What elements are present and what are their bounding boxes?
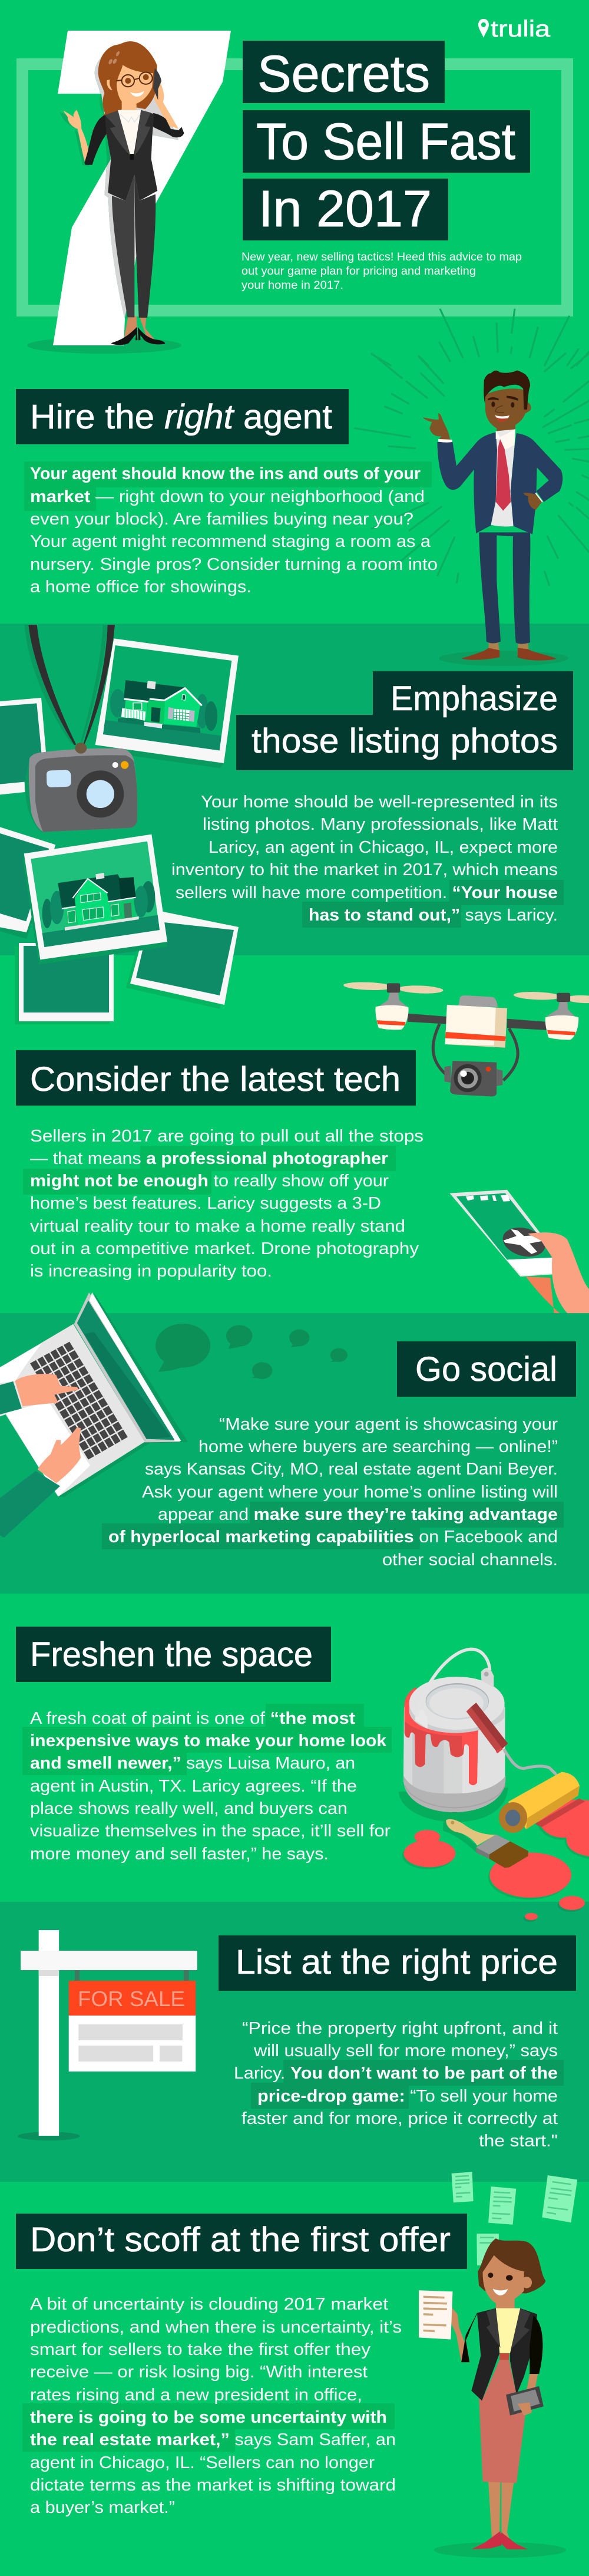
- illustration: photos and camera: [0, 625, 239, 939]
- heading: Consider the latest tech: [30, 1060, 401, 1099]
- body text: home’s best features. Laricy suggests a 3-D: [30, 1194, 381, 1213]
- body text: Your home should be well-represented in its: [201, 793, 558, 812]
- heading: [16, 389, 349, 444]
- body text: Sellers in 2017 are going to pull out all the stops: [30, 1127, 423, 1146]
- body text: “Make sure your agent is showcasing your: [219, 1415, 558, 1434]
- illustration: drone with camera: [343, 981, 589, 1096]
- illustration: woman holding document and tablet: [419, 2238, 566, 2558]
- section: hire the right agent: [16, 354, 589, 666]
- heading: Emphasize: [391, 680, 558, 718]
- heading: Go social: [415, 1350, 557, 1388]
- for sale label: FOR SALE: [78, 1987, 185, 2011]
- illustration: for sale sign: [18, 1930, 197, 2140]
- photo: house one: [95, 638, 239, 768]
- light green frame: [16, 58, 573, 316]
- body text: more money and sell faster,” he says.: [30, 1845, 329, 1863]
- heading: [236, 671, 573, 770]
- body text: listing photos. Many professionals, like Matt: [203, 815, 558, 834]
- body text: out in a competitive market. Drone photography: [30, 1239, 419, 1258]
- section: consider the latest tech: [16, 981, 589, 1313]
- title: Secrets: Secrets: [257, 45, 430, 103]
- body text: [102, 1415, 564, 1569]
- body text: faster and for more, price it correctly at: [241, 2109, 558, 2128]
- agent ground shadow: [439, 651, 568, 666]
- body text: smart for sellers to take the first offer they: [30, 2340, 371, 2359]
- body text: [22, 1704, 392, 1863]
- paint drops crossing band: [523, 1896, 585, 1922]
- heading: Don’t scoff at the first offer: [30, 2221, 451, 2259]
- body text: — that means a professional photographer: [30, 1149, 388, 1168]
- body text: might not be enough to really show off your: [30, 1172, 389, 1190]
- sunburst rays around agent: [355, 354, 589, 585]
- body text: visualize themselves in the space, it’ll sell for: [30, 1822, 391, 1841]
- section: freshen the space: [16, 1627, 589, 1899]
- photo: house two: [22, 835, 167, 965]
- body text: rates rising and a new president in office,: [30, 2386, 362, 2405]
- section: list at the right price: [18, 1896, 585, 2150]
- body text: sellers will have more competition. “Your house: [176, 883, 558, 902]
- section: don't scoff at the first offer: [16, 2172, 577, 2558]
- floating document sheets: [452, 2172, 577, 2265]
- body text: agent in Chicago, IL. “Sellers can no longer: [30, 2453, 375, 2472]
- woman cast shadow on seven: [95, 44, 178, 318]
- body text: Laricy. You don’t want to be part of the: [234, 2064, 558, 2083]
- body text: home where buyers are searching — online!”: [198, 1437, 558, 1456]
- agent shoes: [461, 648, 557, 661]
- sunburst rays upper: [372, 309, 589, 365]
- body text: Laricy, an agent in Chicago, IL, expect more: [209, 838, 558, 857]
- body text: the real estate market,” says Sam Saffer, an: [30, 2430, 396, 2449]
- heading: [219, 1935, 576, 1991]
- photo: lower right blank: [126, 912, 239, 1009]
- heading: [16, 1627, 331, 1682]
- heading: List at the right price: [236, 1943, 558, 1981]
- body text: [234, 2019, 564, 2150]
- woman cast shadow on green: [60, 44, 178, 318]
- body text: Ask your agent where your home’s online listing will: [142, 1483, 558, 1502]
- body text: the start.": [479, 2132, 558, 2150]
- body text: says Kansas City, MO, real estate agent Dani Beyer.: [145, 1460, 558, 1479]
- section: emphasize listing photos: [0, 625, 573, 1024]
- heading: Freshen the space: [30, 1635, 313, 1674]
- body text: [171, 793, 564, 928]
- body text: agent in Austin, TX. Laricy agrees. “If the: [30, 1777, 357, 1796]
- body text: inventory to hit the market in 2017, which means: [171, 860, 558, 879]
- camera strap: [25, 625, 115, 747]
- intro text: your home in 2017.: [241, 279, 343, 292]
- photo: left top: [0, 698, 46, 794]
- body text: dictate terms as the market is shifting toward: [30, 2476, 396, 2495]
- title: In 2017: In 2017: [259, 180, 432, 238]
- paint spills: [402, 1800, 589, 1899]
- body text: a buyer’s market.”: [30, 2498, 175, 2517]
- body text: [22, 2295, 402, 2517]
- body text: even your block). Are families buying near you?: [30, 510, 413, 529]
- body text: has to stand out,” says Laricy.: [309, 906, 558, 925]
- body text: market — right down to your neighborhood (and: [30, 487, 425, 506]
- body text: virtual reality tour to make a home really stand: [30, 1217, 405, 1236]
- logo: trulia: trulia: [491, 17, 550, 42]
- logo: trulia: [478, 17, 550, 42]
- body text: and smell newer,” says Luisa Mauro, an: [30, 1754, 355, 1773]
- body text: place shows really well, and buyers can: [30, 1799, 348, 1818]
- illustration: male agent in suit: [423, 370, 562, 654]
- heading: [397, 1341, 576, 1397]
- illustration: hand holding phone: [449, 1190, 589, 1313]
- heading: Hire the right agent: [30, 398, 332, 436]
- body text: a home office for showings.: [30, 578, 252, 596]
- body text: of hyperlocal marketing capabilities on Facebook and: [108, 1528, 558, 1546]
- illustration: businesswoman on phone: [63, 41, 184, 345]
- woman ground shadow: [27, 337, 181, 354]
- illustration: laptop and hands: [0, 1292, 188, 1538]
- photo: lower left blank: [15, 943, 114, 1024]
- body text: will usually sell for more money,” says: [253, 2041, 558, 2060]
- body text: other social channels.: [382, 1551, 558, 1569]
- body text: is increasing in popularity too.: [30, 1262, 272, 1281]
- intro text: New year, new selling tactics! Heed this advice to map: [241, 250, 522, 263]
- big number seven: [53, 31, 231, 345]
- illustration: paint can, roller and brush: [399, 1649, 589, 1899]
- section: go social: [0, 1292, 576, 1569]
- body text: Your agent should know the ins and outs of your: [30, 464, 421, 483]
- photo: left lower: [0, 827, 55, 939]
- darker section bands: [0, 624, 589, 2182]
- body text: “Price the property right upfront, and it: [242, 2019, 558, 2038]
- body text: there is going to be some uncertainty with: [30, 2408, 387, 2427]
- body text: [23, 1127, 423, 1281]
- body text: inexpensive ways to make your home look: [30, 1731, 387, 1750]
- heading: [16, 2214, 467, 2269]
- body text: A fresh coat of paint is one of “the most: [30, 1709, 355, 1728]
- body text: Your agent might recommend staging a room as a: [30, 532, 431, 551]
- title: To Sell Fast: To Sell Fast: [256, 113, 515, 170]
- camera: [25, 743, 137, 833]
- body text: [24, 461, 438, 596]
- body text: A bit of uncertainty is clouding 2017 market: [30, 2295, 388, 2314]
- body text: predictions, and when there is uncertainty, it’s: [30, 2318, 402, 2337]
- body text: receive — or risk losing big. “With interest: [30, 2363, 368, 2382]
- speech bubbles: [155, 1324, 348, 1379]
- heading: [16, 1050, 416, 1106]
- hero panel: [16, 17, 589, 365]
- body text: appear and make sure they’re taking advantage: [158, 1505, 558, 1524]
- body text: price-drop game: “To sell your home: [257, 2087, 558, 2106]
- intro text: [241, 250, 522, 292]
- body text: nursery. Single pros? Consider turning a room into: [30, 555, 438, 574]
- heading: those listing photos: [252, 722, 558, 760]
- intro text: out your game plan for pricing and marketing: [241, 265, 476, 278]
